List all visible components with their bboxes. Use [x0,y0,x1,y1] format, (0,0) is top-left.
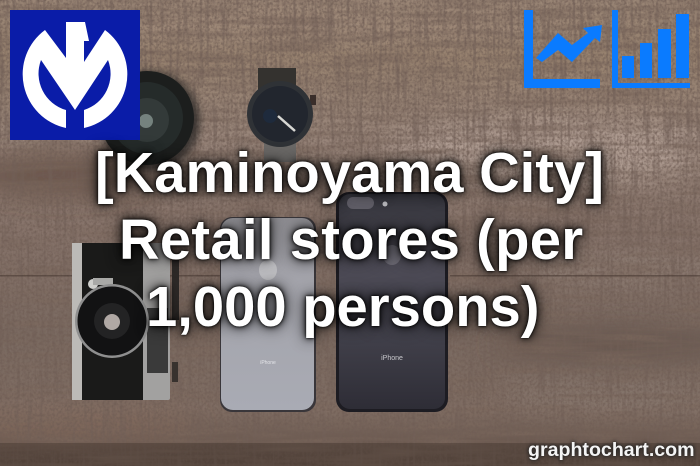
black phone: iPhone [381,355,403,362]
silver phone [220,217,316,412]
logo: blue square with white emblem [10,10,140,140]
black phone [336,192,448,412]
title: Retail stores (per [119,208,583,271]
icon: line chart [524,10,602,88]
source label: graphtochart.com [528,439,695,461]
silver phone: iPhone [260,360,276,366]
title: 1,000 persons) [146,275,540,338]
watch [247,68,316,162]
icon: bar chart [612,10,690,88]
title: [Kaminoyama City] [95,141,604,204]
camera [72,243,179,400]
lens [100,71,200,171]
